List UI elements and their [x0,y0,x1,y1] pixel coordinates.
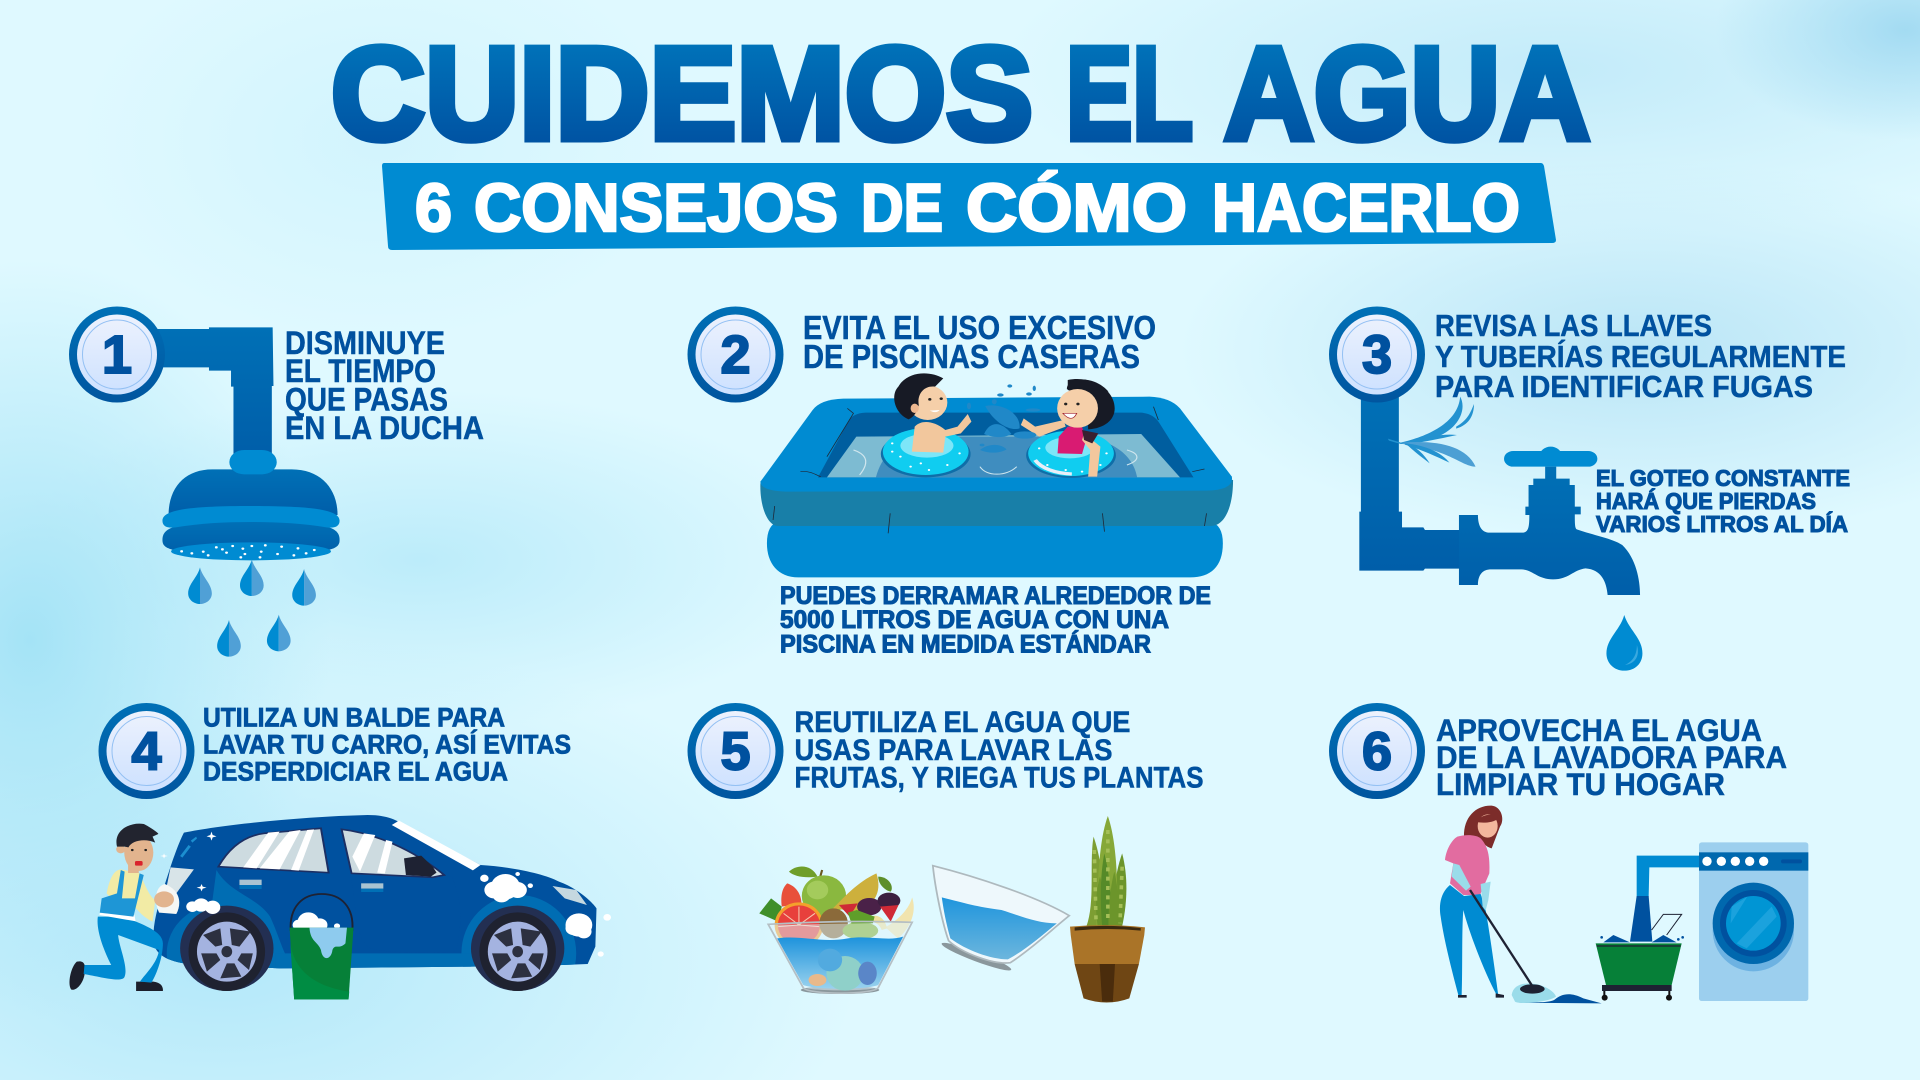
badge 4 [98,703,194,799]
text: tip 1: EL TIEMPO [285,353,436,389]
panel: tip 1 shower [69,306,484,657]
panel: tip 6 washing machine [1329,703,1808,1003]
text: tip 3 heading: REVISA LAS LLAVES [1435,308,1712,343]
text: tip 3 heading: Y TUBERÍAS REGULARMENTE [1435,339,1846,374]
text: tip 4: UTILIZA UN BALDE PARA [203,702,505,732]
badge 6: 6 [1362,722,1392,782]
text: tip 3 note [1596,465,1850,537]
panel: tip 3 faucet [1329,306,1850,671]
panel: tip 2 pool [688,306,1233,658]
text: tip 6: DE LA LAVADORA PARA [1436,739,1787,775]
text: tip 3 heading [1435,308,1846,404]
text: tip 5: REUTILIZA EL AGUA QUE [794,706,1130,739]
text: tip 1: EN LA DUCHA [285,410,484,446]
illustration: man washing car with bucket [70,815,611,1012]
panel: tip 5 fruit water plant [688,703,1204,1002]
text: tip 5: USAS PARA LAVAR LAS [794,734,1112,767]
badge 3 [1329,306,1425,402]
illustration: fruit bowl, pouring bowl, potted plant [759,816,1145,1002]
text: tip 3 heading: PARA IDENTIFICAR FUGAS [1435,369,1813,404]
text: tip 4 [203,702,571,786]
text: tip 2 note: PISCINA EN MEDIDA ESTÁNDAR [780,630,1151,658]
badge 5: 5 [720,722,751,782]
badge 2 [688,306,784,402]
subtitle banner: CONSEJOS [474,170,838,246]
badge 1: 1 [102,325,132,385]
text: tip 3 note: EL GOTEO CONSTANTE [1596,465,1850,491]
subtitle banner: DE [861,170,943,246]
title: EL [1066,20,1193,167]
text: tip 2 note [780,582,1211,658]
subtitle banner [382,163,1556,250]
icon: shower with pipe and drops [157,327,340,657]
subtitle banner: CÓMO [966,170,1187,246]
text: tip 6: APROVECHA EL AGUA [1436,712,1762,748]
panel: tip 4 car [70,702,611,1012]
illustration: leaking pipe and dripping faucet [1359,397,1642,671]
badge 2: 2 [720,325,751,385]
text: tip 2 heading: EVITA EL USO EXCESIVO [803,309,1156,346]
text: tip 3 note: HARÁ QUE PIERDAS [1596,487,1816,514]
text: tip 5 [794,706,1204,794]
text: tip 3 note: VARIOS LITROS AL DÍA [1596,510,1848,537]
badge 4: 4 [131,722,162,782]
text: tip 6 [1436,712,1787,802]
title [331,20,1590,167]
text: tip 6: LIMPIAR TU HOGAR [1436,766,1725,802]
text: tip 1 [285,325,484,446]
text: tip 5: FRUTAS, Y RIEGA TUS PLANTAS [794,762,1204,794]
badge 3: 3 [1362,325,1392,385]
text: tip 2 heading [803,309,1156,375]
text: tip 2 note: PUEDES DERRAMAR ALREDEDOR DE [780,582,1211,610]
badge 5 [688,703,784,799]
text: tip 1: DISMINUYE [285,325,445,361]
title: AGUA [1224,20,1590,167]
illustration: inflatable pool with children [760,373,1233,577]
text: tip 4: DESPERDICIAR EL AGUA [203,756,508,786]
badge 6 [1329,703,1425,799]
title: CUIDEMOS [331,20,1033,167]
badge 1 [69,306,165,402]
text: tip 2 heading: DE PISCINAS CASERAS [803,338,1140,375]
text: tip 2 note: 5000 LITROS DE AGUA CON UNA [780,606,1169,634]
text: tip 1: QUE PASAS [285,382,448,418]
subtitle banner: HACERLO [1212,170,1520,246]
text: tip 4: LAVAR TU CARRO, ASÍ EVITAS [203,730,571,760]
illustration: woman mopping, tub, washing machine [1440,806,1808,1003]
subtitle banner: 6 [415,170,452,246]
